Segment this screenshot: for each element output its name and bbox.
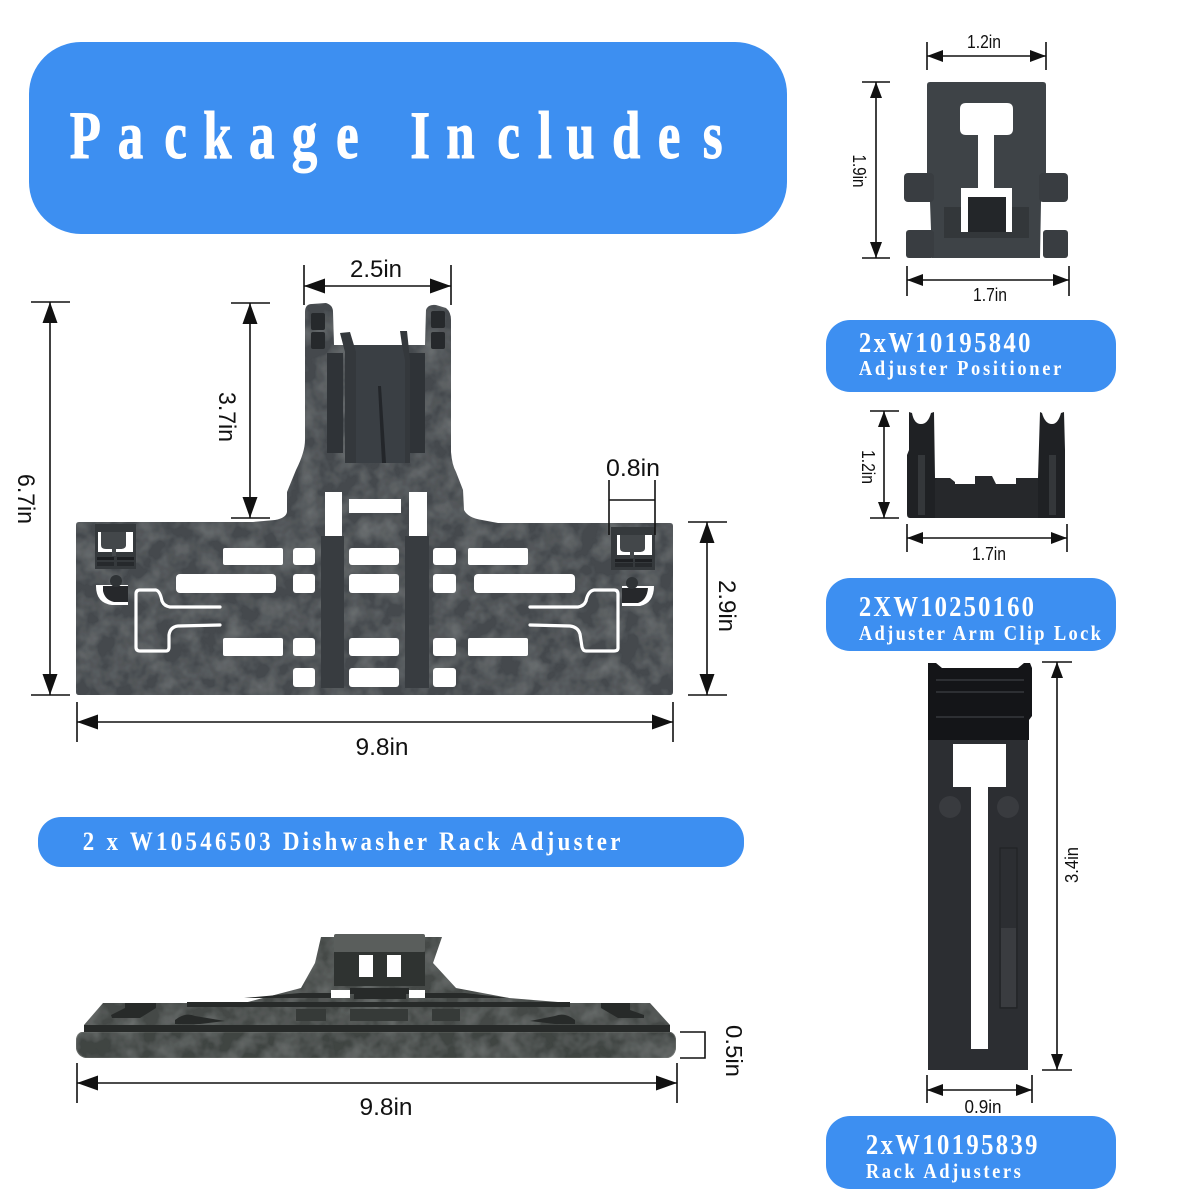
right T-shaped cutout bbox=[530, 590, 618, 651]
dimension: 0.8in bbox=[606, 455, 660, 535]
dimension: 1.2in clip bbox=[858, 411, 899, 518]
top box bbox=[334, 934, 425, 952]
dimension: 0.9in: 0.9in bbox=[964, 1097, 1002, 1117]
dimension: 9.8in width lower bbox=[77, 1063, 677, 1121]
rack adjuster strip part bbox=[928, 663, 1032, 1070]
adjuster arm clip lock part bbox=[907, 412, 1065, 518]
label: rack adjusters bbox=[826, 1116, 1116, 1189]
label: rack adjusters: Rack Adjusters bbox=[866, 1160, 1021, 1183]
dimension: 1.7in clip: 1.7in bbox=[972, 544, 1006, 564]
dimension: 3.7in bbox=[213, 303, 270, 518]
left T-shaped cutout bbox=[136, 590, 220, 651]
engraved plate bbox=[1000, 848, 1017, 1008]
dimension: 0.8in: 0.8in bbox=[606, 455, 660, 482]
label: rack adjuster: 2 x W10546503 Dishwasher Rack Adjuster bbox=[83, 828, 621, 856]
dimension: 1.2in positioner bbox=[927, 32, 1046, 70]
dimension: 1.7in clip bbox=[907, 524, 1067, 564]
slot bbox=[953, 744, 1006, 1049]
dark vertical ribs bbox=[321, 536, 429, 688]
front bar bbox=[76, 1032, 676, 1058]
dimension: 3.4in bbox=[1042, 662, 1082, 1070]
dimension: 9.8in width lower: 9.8in bbox=[360, 1094, 412, 1121]
right arm bbox=[1037, 412, 1065, 518]
label: clip lock: 2XW10250160 bbox=[859, 592, 1034, 622]
label: adjuster positioner: Adjuster Positioner bbox=[859, 357, 1061, 380]
dimension: 1.9in: 1.9in bbox=[849, 154, 869, 188]
dimension: 1.7in positioner bbox=[907, 266, 1069, 305]
stem channels bbox=[311, 311, 445, 463]
positioner body bbox=[927, 82, 1046, 258]
dimension: 1.7in positioner: 1.7in bbox=[973, 285, 1007, 305]
label: rack adjuster bbox=[38, 817, 744, 867]
strip body bbox=[928, 738, 1028, 1070]
strip head bbox=[928, 663, 1032, 740]
label: rack adjusters: 2xW10195839 bbox=[866, 1130, 1038, 1160]
dimension: 9.8in width: 9.8in bbox=[356, 734, 408, 761]
box windows bbox=[331, 955, 425, 998]
dimension: 2.5in: 2.5in bbox=[350, 256, 402, 283]
main rack adjuster, top view bbox=[76, 303, 673, 695]
recess bbox=[944, 207, 1029, 238]
dimension: 9.8in width bbox=[77, 702, 673, 761]
arm highlights bbox=[918, 455, 1056, 515]
white slots bbox=[176, 492, 575, 687]
head grooves bbox=[936, 680, 1024, 717]
title text: Package Includes bbox=[70, 98, 723, 174]
box front bbox=[334, 952, 425, 986]
dimension: 6.7in bbox=[12, 302, 70, 695]
dimension: 2.9in: 2.9in bbox=[713, 580, 740, 632]
label: clip lock bbox=[826, 578, 1116, 651]
label: clip lock: Adjuster Arm Clip Lock bbox=[859, 622, 1101, 645]
dimension: 1.2in positioner: 1.2in bbox=[967, 32, 1001, 52]
rack adjuster, side view bbox=[76, 934, 676, 1058]
dimension: 0.9in bbox=[927, 1075, 1032, 1117]
dimension: 1.2in clip: 1.2in bbox=[858, 450, 878, 484]
dimension: 1.9in bbox=[849, 82, 890, 258]
dimension: 6.7in: 6.7in bbox=[12, 474, 39, 524]
side tabs bbox=[904, 173, 1068, 258]
base with bumps bbox=[935, 476, 1038, 518]
dimension: 3.4in: 3.4in bbox=[1062, 847, 1082, 883]
rivets bbox=[939, 796, 1019, 818]
dimension: 2.5in bbox=[304, 256, 451, 305]
right clip bbox=[611, 527, 655, 606]
title banner bbox=[29, 42, 787, 234]
dimension: 3.7in: 3.7in bbox=[213, 392, 240, 442]
adjuster positioner part bbox=[904, 82, 1068, 258]
label: adjuster positioner bbox=[826, 320, 1116, 392]
dark details bbox=[84, 988, 670, 1032]
T-shaped opening bbox=[960, 103, 1013, 232]
label: adjuster positioner: 2xW10195840 bbox=[859, 328, 1030, 358]
left clip bbox=[95, 524, 136, 605]
left arm bbox=[907, 412, 938, 518]
dimension: 0.5in bbox=[680, 1025, 747, 1077]
dimension: 2.9in bbox=[688, 522, 740, 695]
dimension: 0.5in: 0.5in bbox=[721, 1025, 747, 1077]
